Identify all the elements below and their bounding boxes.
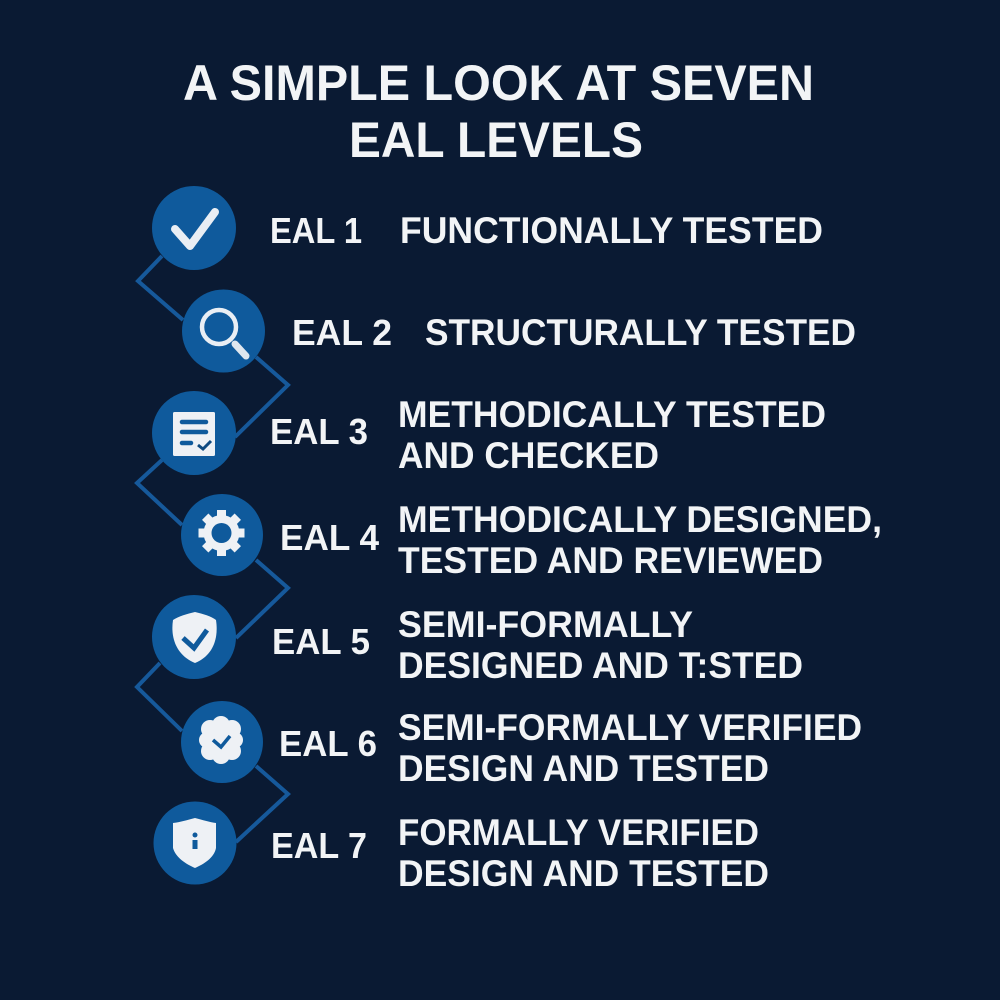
- level 5 label: DESIGNED AND T:STED: [398, 645, 803, 686]
- level 7 label: [271, 812, 769, 894]
- icon: gear: [181, 494, 263, 576]
- level 4 label: TESTED AND REVIEWED: [398, 540, 823, 581]
- level 7 label: EAL 7: [271, 825, 367, 866]
- level 7 label: FORMALLY VERIFIED: [398, 812, 759, 853]
- title: [183, 55, 814, 168]
- icon: badge with check: [181, 701, 263, 783]
- level 5 label: EAL 5: [272, 621, 370, 662]
- level 1 label: EAL 1: [270, 210, 362, 251]
- icon: magnifying glass: [182, 290, 265, 372]
- level 6 label: [279, 707, 862, 789]
- level 6 label: DESIGN AND TESTED: [398, 748, 769, 789]
- title: EAL LEVELS: [349, 112, 643, 168]
- icon: shield with info: [154, 802, 236, 884]
- level 1 label: FUNCTIONALLY TESTED: [400, 210, 823, 251]
- level 5 label: [272, 604, 803, 686]
- connector line: [137, 256, 288, 842]
- level 6 label: EAL 6: [279, 723, 377, 764]
- level 6 label: SEMI-FORMALLY VERIFIED: [398, 707, 862, 748]
- level 4 label: [280, 499, 882, 581]
- icon: check mark: [152, 186, 236, 270]
- level 2 label: EAL 2: [292, 312, 392, 353]
- level 4 label: METHODICALLY DESIGNED,: [398, 499, 882, 540]
- level 7 label: DESIGN AND TESTED: [398, 853, 769, 894]
- level 3 label: AND CHECKED: [398, 435, 659, 476]
- level 3 label: METHODICALLY TESTED: [398, 394, 826, 435]
- icon: shield with check: [152, 595, 236, 679]
- level 5 label: SEMI-FORMALLY: [398, 604, 693, 645]
- level 3 label: EAL 3: [270, 411, 368, 452]
- level 4 label: EAL 4: [280, 517, 379, 558]
- level 2 label: STRUCTURALLY TESTED: [425, 312, 856, 353]
- icon: document with check: [152, 391, 236, 475]
- level 3 label: [270, 394, 826, 476]
- title: A SIMPLE LOOK AT SEVEN: [183, 55, 814, 111]
